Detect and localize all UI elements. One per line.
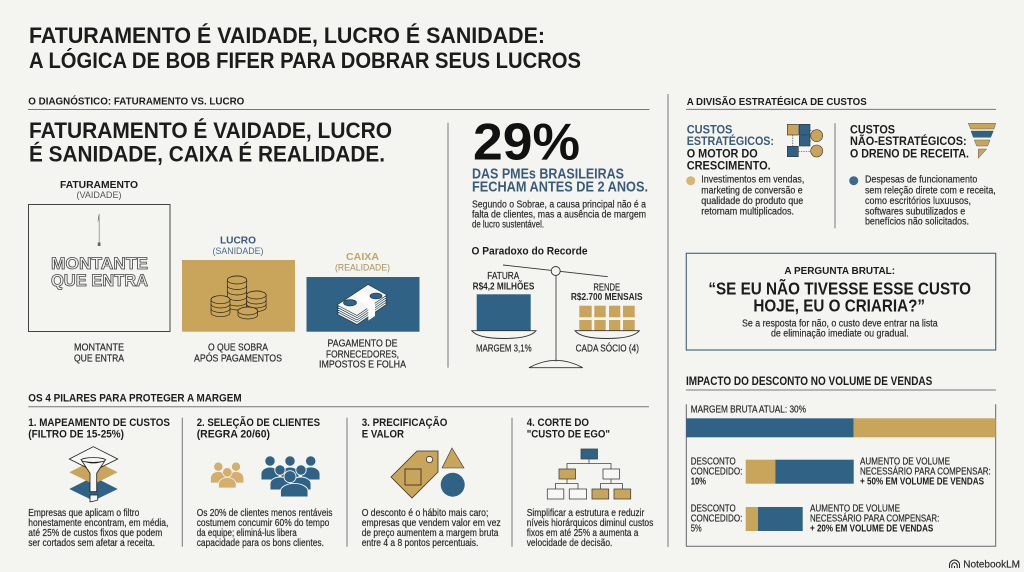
pilar 2: costumem concumir 60% do tempo [197,518,330,529]
column: faturamento: 1 [97,204,101,256]
icon: org chart [547,449,631,499]
pilar 2: 2. SELEÇÃO DE CLIENTES [197,416,320,429]
pilar 3: empresas que vendem valor em vez [362,518,501,529]
callout: a pergunta brutal: de eliminação imediate ou gradual. [771,329,909,340]
callout: a pergunta brutal: “SE EU NÃO TIVESSE ESSE CUSTO [708,277,971,298]
pilar 2: capacidade para os bons clientes. [197,538,324,549]
pilar 1: até 25% de custos fixos que podem [28,528,162,539]
row: desconto 10% [691,456,991,487]
big statistic: 29%: DAS PMEs BRASILEIRAS [472,165,624,182]
column: caixa: IMPOSTOS E FOLHA [319,360,406,371]
icon: coins [211,276,266,319]
chart: paradoxo do recorde (balance): CADA SÓCIO (4) [576,342,639,355]
big statistic: 29% [472,113,648,196]
row: desconto 10%: DESCONTO [691,456,736,467]
column: custos estratégicos: CRESCIMENTO. [687,158,771,172]
pilar 1: 1. MAPEAMENTO DE CUSTOS [28,417,170,429]
row: desconto 5%: CONCEDIDO: [691,514,742,525]
panel: impacto do desconto [686,376,996,546]
pilar 3 [362,416,501,549]
title [29,23,581,73]
column: faturamento: QUE ENTRA [51,271,148,290]
column: custos estratégicos: O MOTOR DO [687,146,758,160]
column: lucro [182,234,295,365]
pilar 4: níveis hiorárquicos diminul custos [527,518,653,529]
pilar 1: ser cortados sem afetar a receita. [28,538,155,549]
column: caixa [306,251,420,371]
pilar 2: da equipe; eliminá-lus libera [197,528,297,539]
row: desconto 5%: NECESSÁRIO PARA COMPENSAR: [810,512,939,525]
icon: connected nodes [787,124,823,157]
column: custos não-estratégicos: NÃO-ESTRATÉGICOS: [850,133,967,148]
row: desconto 10%: 10% [691,476,706,487]
column: custos não-estratégicos: como escritórios luxuusos, [865,196,971,207]
bullet: gold [686,176,695,185]
text block: causa [472,199,646,231]
chart: paradoxo do recorde (balance): FATURA [487,271,520,282]
column: faturamento [28,179,170,365]
headline: FATURAMENTO É VAIDADE, LUCRO [29,118,392,143]
icon: banknotes [337,284,387,324]
panel: diagnóstico [28,94,650,371]
column: faturamento: MONTANTE [51,254,148,273]
column: custos estratégicos: ESTRATÉGICOS: [687,133,774,148]
column: faturamento: MONTANTE [74,343,124,354]
column: custos não-estratégicos: Despesas de funcionamento [865,175,978,186]
column: custos estratégicos: marketing de conversão e [701,185,803,196]
bar: margem bruta: MARGEM BRUTA ATUAL: 30% [691,404,806,415]
column: custos não-estratégicos [849,122,996,228]
chart: paradoxo do recorde (balance): O Paradoxo do Recorde [472,245,588,257]
chart: paradoxo do recorde (balance): MARGEM 3,1% [476,344,532,355]
pilar 3: 3. PRECIFICAÇÃO [362,416,448,429]
pilar 2: (REGRA 20/60) [197,428,270,440]
column: faturamento: (VAIDADE) [76,190,122,201]
row: desconto 10%: AUMENTO DE VOLUME [860,456,950,467]
big statistic: 29%: 29% [473,113,580,171]
section heading: diagnóstico: O DIAGNÓSTICO: FATURAMENTO VS. LUCRO [28,94,244,108]
column: caixa: CAIXA [346,251,379,263]
row: desconto 5%: + 20% EM VOLUME DE VENDAS [810,524,934,535]
section heading: pilares: OS 4 PILARES PARA PROTEGER A MARGEM [28,393,242,405]
chart: paradoxo do recorde (balance): RENDE [593,283,620,294]
column: lucro: (SANIDADE) [212,246,264,257]
row: desconto 10%: NECESSÁRIO PARA COMPENSAR: [860,464,991,477]
row: desconto 5%: DESCONTO [691,504,736,515]
column: custos não-estratégicos: softwares subutilizados e [865,206,966,217]
pilar 1 [28,417,170,549]
column: custos não-estratégicos: benefícios não solicitados. [865,217,969,228]
column: custos estratégicos: qualidade do produto que [701,196,804,207]
pilar 1: honestamente encontram, em média, [28,518,168,529]
column: custos estratégicos: Investimentos em vendas, [701,175,804,186]
row: desconto 5%: AUMENTO DE VOLUME [810,504,900,515]
column: caixa: (REALIDADE) [335,263,390,274]
pilar 4: "CUSTO DE EGO" [527,428,610,440]
row: desconto 5%: 5% [691,524,702,535]
row: desconto 10%: CONCEDIDO: [691,466,742,477]
icon: funnel and filter planes [69,447,118,502]
icon: small client group [210,462,244,488]
logo: NotebookLM: NotebookLM [963,559,1020,571]
text block: causa: de lucro sustentável. [472,220,544,231]
column: custos estratégicos: retornam multiplicados. [701,206,794,217]
column divider [667,94,669,547]
pilar 4 [527,417,653,549]
big statistic: 29%: FECHAM ANTES DE 2 ANOS. [472,179,648,196]
chart: paradoxo do recorde (balance): R$2.700 MENSAIS [571,292,643,303]
chart: paradoxo do recorde (balance): R$4,2 MILHÕES [473,279,535,292]
column: faturamento: FATURAMENTO [60,179,138,191]
pilar 4: velocidade de decisão. [527,538,612,549]
column: lucro: APÓS PAGAMENTOS [194,352,282,365]
column: custos não-estratégicos: CUSTOS [850,122,895,136]
pilar 3: entre 4 a 8 pontos percentuais. [362,538,478,549]
pilar 3: O desconto é o hábito mais caro; [362,508,488,519]
chart: paradoxo do recorde (balance) [472,245,643,368]
column: custos estratégicos: CUSTOS [687,122,732,136]
section heading: impacto: IMPACTO DO DESCONTO NO VOLUME DE VENDAS [686,376,933,388]
bullet: blue [849,176,858,185]
callout: a pergunta brutal [686,253,996,350]
column: custos não-estratégicos: O DRENO DE RECEITA. [850,146,969,160]
column: caixa: FORNECEDORES, [326,349,399,360]
icon: price tag and shapes [391,448,465,498]
bar: margem bruta [686,404,996,437]
column: custos estratégicos [686,122,823,217]
pilar 4: Simplificar a estrutura e reduzir [527,508,645,519]
pilar 1: (FILTRO DE 15-25%) [28,428,124,440]
pilar 4: 4. CORTE DO [527,417,589,429]
pilar 1: Empresas que aplicam o filtro [28,508,140,519]
column: lucro: LUCRO [220,234,256,246]
icon: draining funnel [968,123,996,158]
column: custos não-estratégicos: sem releção direte com e receita, [865,185,996,196]
pilar 4: fixos em até 25% a aumenta a [527,528,639,539]
pilar 3: de preço aumentem a margem bruta [362,528,499,539]
row: desconto 5% [691,504,939,535]
row: desconto 10%: + 50% EM VOLUME DE VENDAS [860,476,984,487]
title: A LÓGICA DE BOB FIFER PARA DOBRAR SEUS LUCROS [29,48,581,73]
pilar 2 [197,416,332,549]
panel: 4 pilares [28,393,653,549]
headline: É SANIDADE, CAIXA É REALIDADE. [29,142,385,167]
pilar 2: Os 20% de clientes menos rentáveis [197,508,332,519]
callout: a pergunta brutal: A PERGUNTA BRUTAL: [784,265,895,277]
headline [29,118,392,167]
text block: causa: Segundo o Sobrae, a causa principal não é a [472,199,646,210]
title: FATURAMENTO É VAIDADE, LUCRO É SANIDADE: [29,23,545,48]
panel: divisão estratégica de custos [686,95,996,228]
column: lucro: O QUE SOBRA [208,343,268,354]
callout: a pergunta brutal: Se a resposta for não, o custo deve entrar na lista [742,319,938,330]
column: faturamento: QUE ENTRA [74,354,124,365]
icon: large client group [261,456,320,497]
pilar 3: E VALOR [362,428,404,440]
callout: a pergunta brutal: HOJE, EU O CRIARIA?” [753,296,925,316]
section heading: divisão: A DIVISÃO ESTRATÉGICA DE CUSTOS [687,95,867,108]
text block: causa: falta de clientes, mas a ausência de margem [472,209,646,220]
column: caixa: PAGAMENTO DE [328,339,398,350]
